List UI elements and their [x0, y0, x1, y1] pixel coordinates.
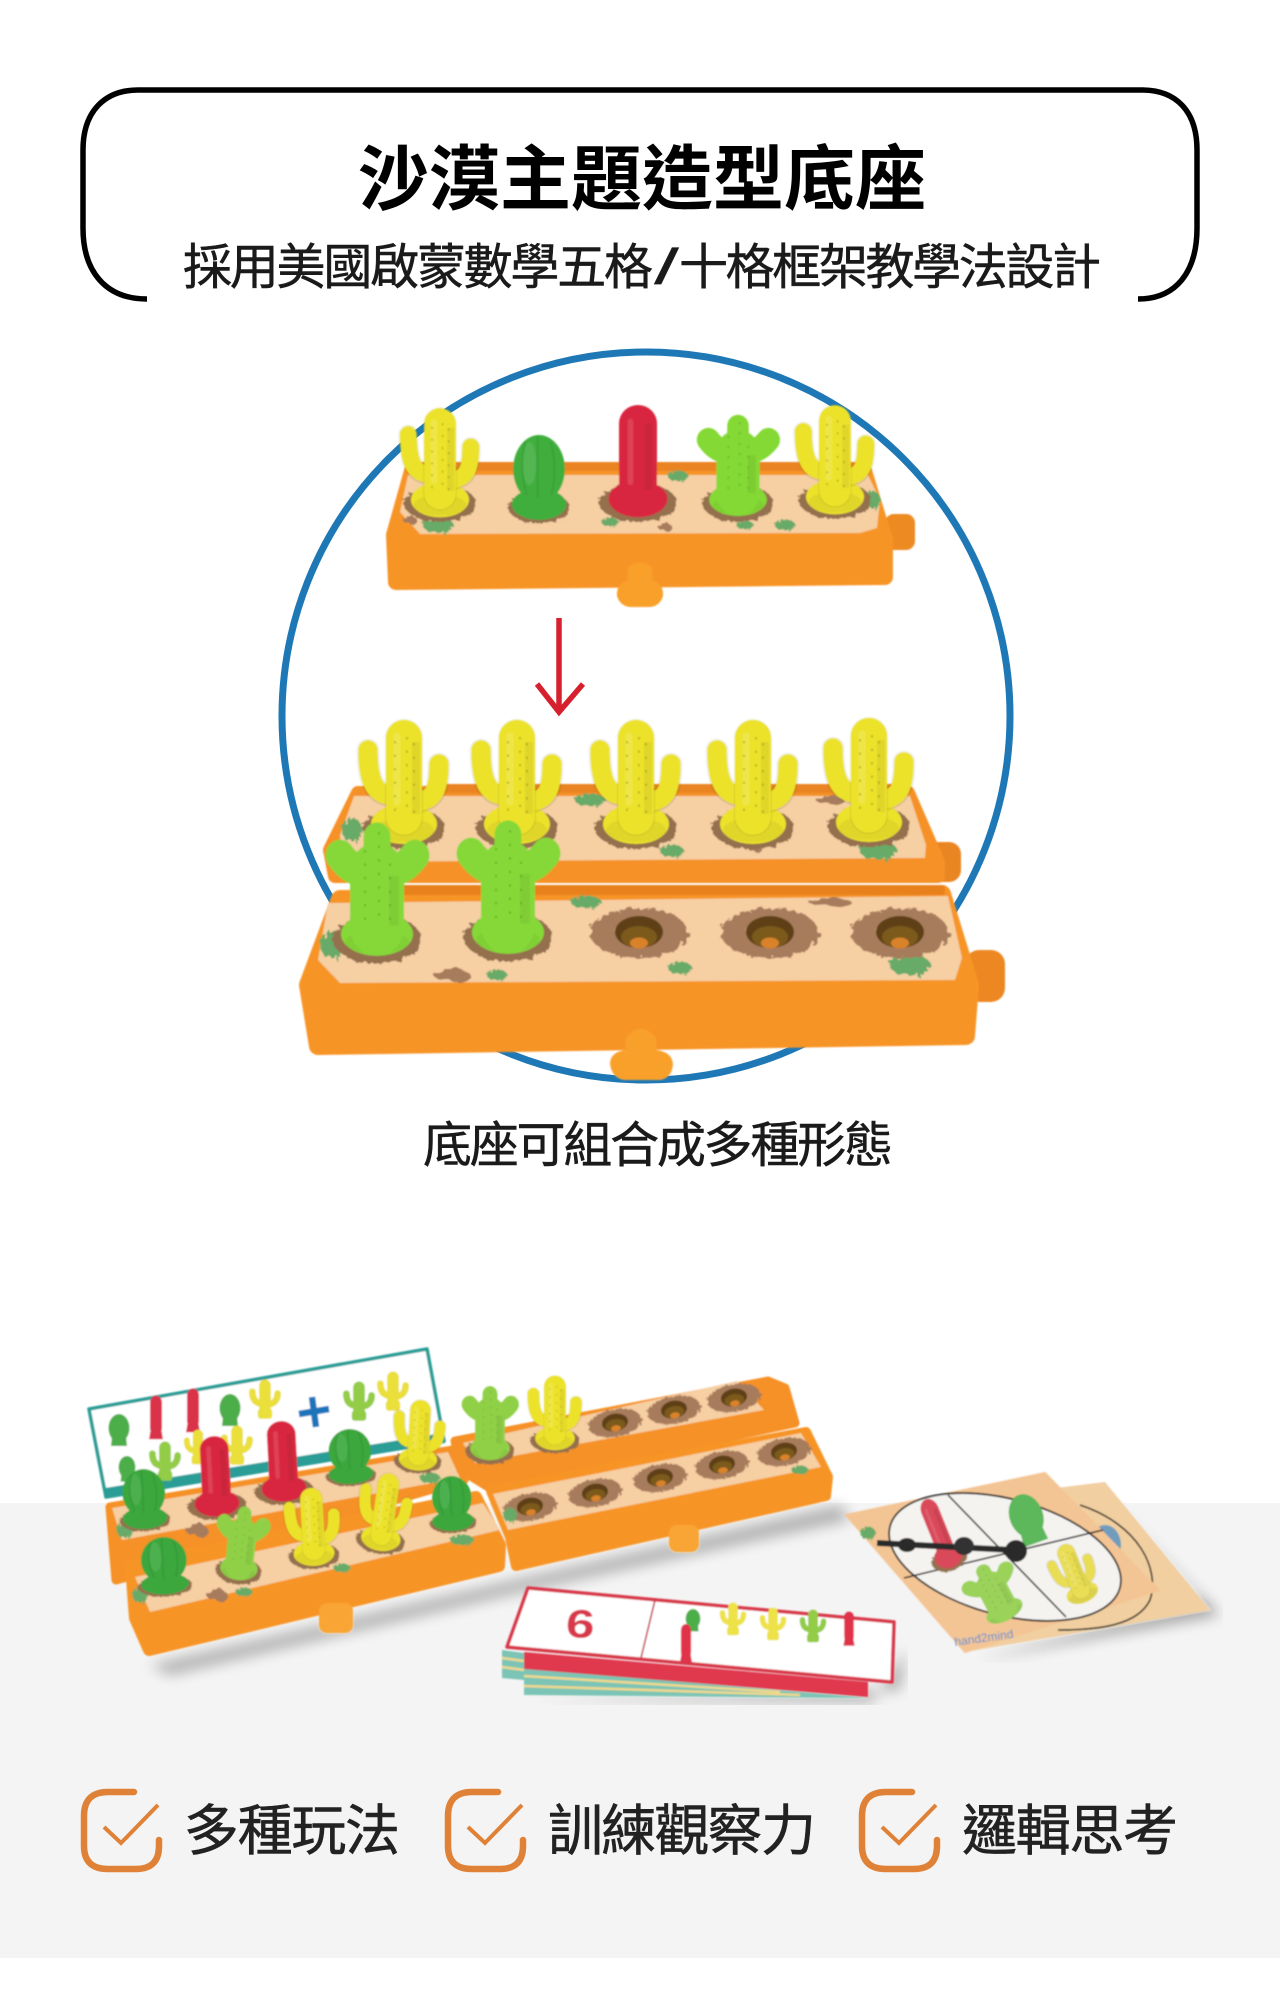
cactus lime — [703, 423, 773, 522]
title: 沙漠主題造型底座 — [358, 141, 926, 220]
feature: 訓練觀察力 — [448, 1792, 816, 1869]
wheel dividers — [904, 1495, 1103, 1617]
stack shadow — [530, 1650, 905, 1702]
right back board — [455, 1380, 795, 1488]
subtitle: 採用美國啟蒙數學五格 — [183, 241, 653, 295]
white top card — [507, 1588, 894, 1682]
cactus yellow — [404, 415, 476, 522]
back board — [330, 784, 961, 882]
number card stack — [502, 1588, 905, 1702]
check icon — [84, 1792, 159, 1869]
feature: 邏輯思考 — [862, 1792, 1178, 1869]
board shadows — [150, 1505, 850, 1675]
combined bases — [308, 726, 1005, 1080]
card number: 6 — [564, 1601, 596, 1647]
wheel — [875, 1470, 1135, 1644]
left back cacti — [117, 1403, 445, 1533]
subtitle: 十格框架教學法設計 — [679, 241, 1101, 295]
soil holes — [590, 908, 949, 958]
red down arrow — [537, 618, 583, 712]
back wheel arc — [1058, 1505, 1152, 1630]
plus sign — [299, 1397, 329, 1427]
label: 多種玩法 — [184, 1800, 400, 1862]
spinner shadow — [975, 1490, 1220, 1660]
right front board — [491, 1432, 828, 1566]
board rim — [420, 462, 860, 471]
cactus yellow — [799, 412, 871, 519]
label: 邏輯思考 — [962, 1800, 1178, 1862]
ground details — [320, 896, 930, 981]
left front board — [131, 1497, 500, 1650]
wheel cactus yellow — [1048, 1542, 1102, 1609]
check icon — [448, 1792, 523, 1869]
yellow cacti row — [363, 726, 910, 849]
ground details — [403, 471, 880, 533]
gray background band — [0, 1503, 1280, 1958]
spinner arrow — [877, 1537, 1027, 1562]
cactus green — [508, 435, 570, 523]
red card below — [524, 1652, 868, 1697]
sand surface — [400, 475, 880, 534]
wheel cactus green — [1003, 1489, 1052, 1549]
cactus red — [599, 422, 677, 522]
brand mark: hand2mind — [953, 1627, 1014, 1649]
peg bottom — [617, 562, 663, 607]
stacked card edges — [502, 1650, 524, 1680]
wheel cactus lime — [964, 1560, 1028, 1629]
board body — [394, 471, 885, 582]
front spinner card — [846, 1473, 1159, 1652]
caption: 底座可組合成多種形態 — [423, 1119, 893, 1173]
front board slot — [400, 885, 945, 895]
front board — [308, 894, 970, 1046]
label: 訓練觀察力 — [548, 1800, 816, 1862]
lime cacti — [333, 831, 552, 963]
card divider — [641, 1600, 655, 1658]
spinner cards — [846, 1470, 1220, 1660]
check icon — [862, 1792, 937, 1869]
card icons — [680, 1608, 855, 1662]
single base with five cacti — [394, 412, 915, 607]
subtitle — [183, 239, 1101, 295]
feature row — [84, 1792, 1178, 1869]
header rounded frame — [83, 90, 1197, 299]
card weed — [860, 1527, 876, 1539]
blue circle — [282, 352, 1010, 1080]
peg — [319, 1603, 353, 1633]
teal card — [89, 1349, 445, 1498]
feature: 多種玩法 — [84, 1792, 400, 1869]
front board bottom peg — [610, 1029, 673, 1080]
product photo: boards — [89, 1349, 850, 1675]
front board right peg — [965, 950, 1005, 1002]
header panel — [83, 90, 1197, 299]
back spinner card — [965, 1482, 1210, 1652]
peg — [669, 1525, 699, 1552]
left back board — [110, 1450, 464, 1580]
wheel cactus red — [912, 1502, 971, 1577]
front board sand — [318, 896, 962, 983]
peg right — [885, 514, 915, 550]
left front cacti — [136, 1475, 477, 1598]
subtitle: / — [654, 239, 680, 295]
